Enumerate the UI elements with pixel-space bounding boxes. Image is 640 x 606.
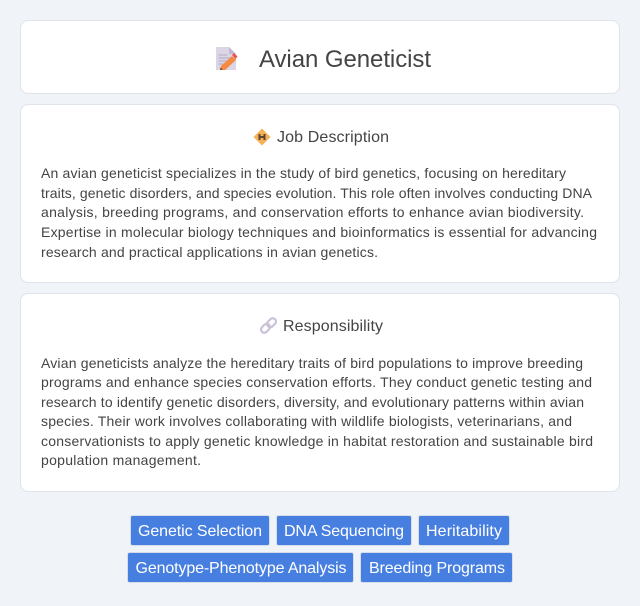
text block: responsibility: species. Their work involves collaborating with wildlife biologists, veterinarians, and — [41, 413, 572, 429]
text block: responsibility: research to identify genetic disorders, diversity, and evolutionary patterns within avian — [41, 394, 584, 410]
text block: job description: analysis, breeding programs, and conservation efforts to enhance avian biodiversity. — [41, 204, 584, 220]
text block: responsibility: population management. — [41, 452, 201, 468]
text block: responsibility: programs and enhance species conservation efforts. They conduct genetic testing and — [41, 374, 592, 390]
tag: Heritability: Heritability — [426, 523, 502, 540]
text block: responsibility — [41, 355, 593, 468]
text block: job description: traits, genetic disorders, and species evolution. This role often involves conducting DNA — [41, 185, 593, 201]
tag: Genotype-Phenotype Analysis: Genotype-Phenotype Analysis — [136, 560, 346, 577]
heading: responsibility: Responsibility — [283, 318, 383, 335]
tag: Genetic Selection — [130, 516, 270, 546]
title: Avian Geneticist — [259, 46, 431, 73]
text block: job description: Expertise in molecular biology techniques and bioinformatics is essential for advancing — [41, 224, 597, 240]
panel: title card — [20, 20, 620, 94]
text block: job description — [41, 165, 597, 260]
panel: responsibility card — [20, 293, 620, 492]
text block: job description: An avian geneticist specializes in the study of bird genetics, focusing on hereditary — [41, 165, 566, 181]
text block: responsibility: Avian geneticists analyze the hereditary traits of bird populations to improve breeding — [41, 355, 583, 371]
tag: Genetic Selection: Genetic Selection — [138, 523, 262, 540]
heading: job description: Job Description — [277, 129, 389, 146]
icon: chain link — [260, 317, 277, 334]
tag: Breeding Programs — [360, 552, 512, 582]
tag: Breeding Programs: Breeding Programs — [369, 560, 505, 577]
tag: DNA Sequencing: DNA Sequencing — [284, 523, 404, 540]
panel: job description card — [20, 104, 620, 283]
tag: DNA Sequencing — [276, 516, 412, 546]
text block: job description: research and practical applications in avian genetics. — [41, 244, 378, 260]
tag: Heritability — [418, 516, 510, 546]
icon: document with pencil — [216, 47, 238, 70]
tag: Genotype-Phenotype Analysis — [128, 552, 354, 582]
text block: responsibility: conservationists to apply genetic knowledge in habitat restoration and sustainable bird — [41, 433, 593, 449]
icon: job description diamond — [254, 128, 270, 146]
